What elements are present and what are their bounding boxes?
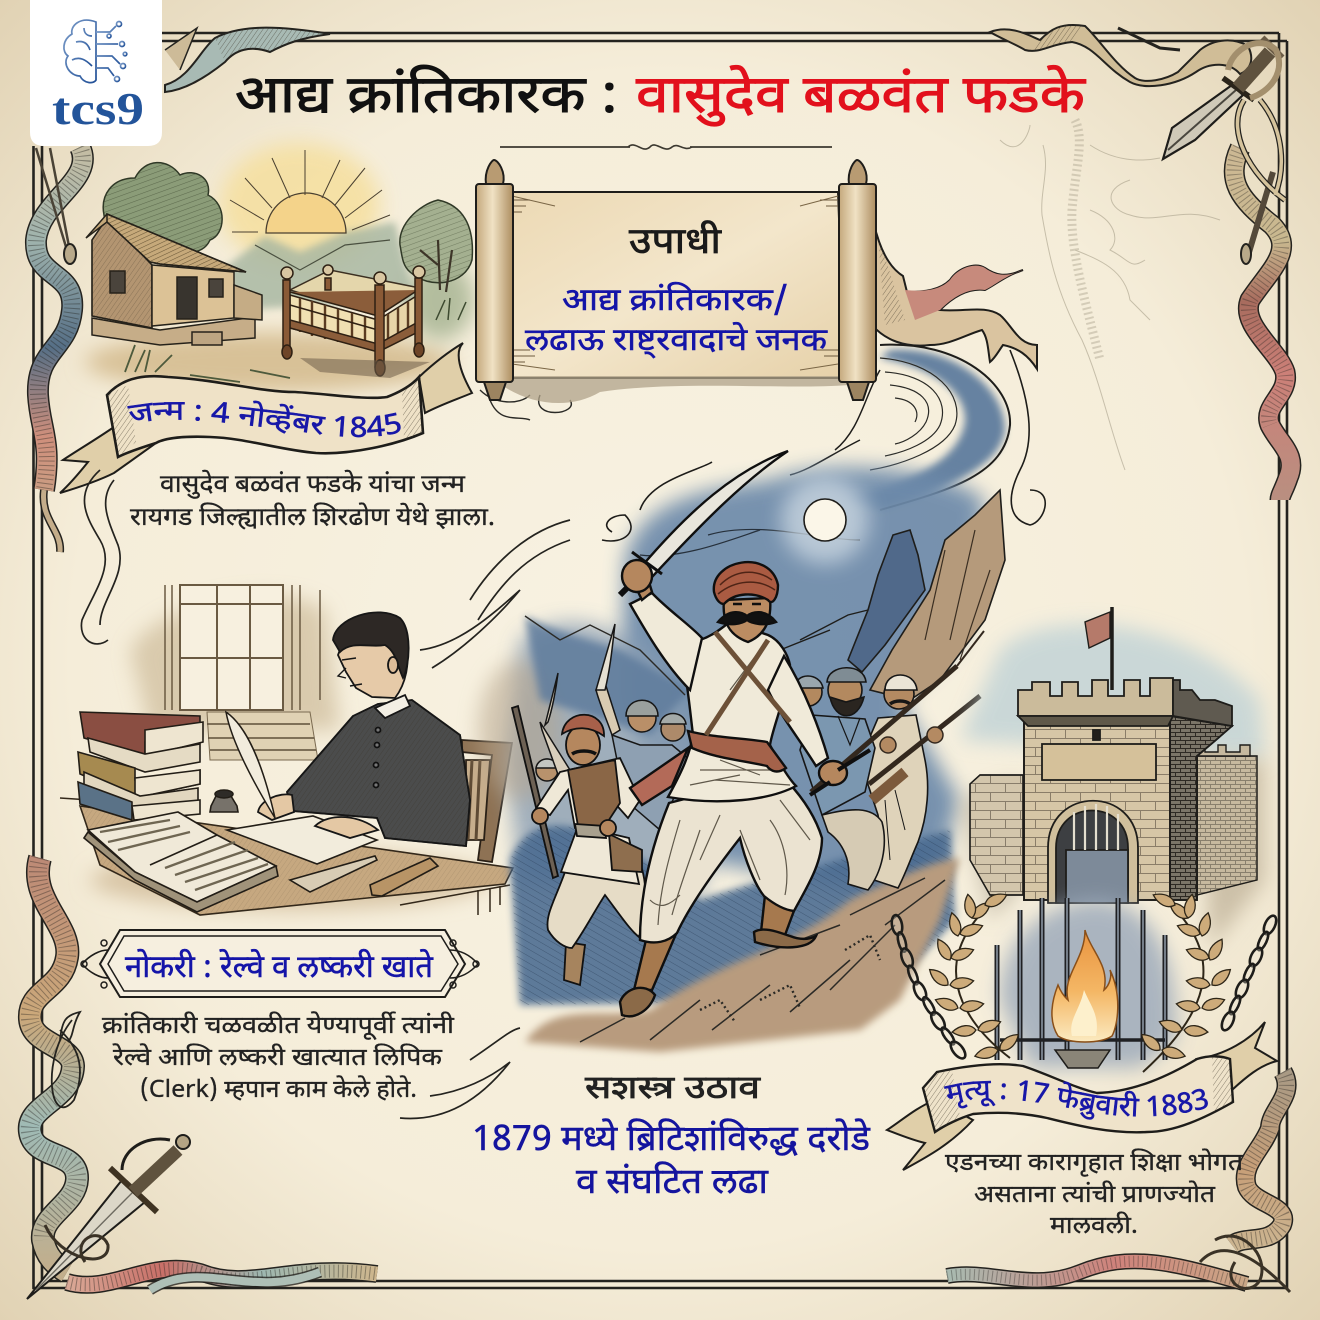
icon: circuit brain bbox=[64, 20, 127, 83]
death date label: मृत्यू : 17 फेब्रुवारी 1883 bbox=[944, 1080, 1208, 1120]
chain right bbox=[1219, 914, 1279, 1032]
ribbon: top left border braid bbox=[36, 147, 83, 552]
uprising description: 1879 मध्ये ब्रिटिशांविरुद्ध दरोडे bbox=[472, 1118, 871, 1165]
birth description: वासुदेव बळवंत फडके यांचा जन्म bbox=[160, 468, 466, 503]
employment description bbox=[102, 1011, 455, 1107]
background comrades, right bbox=[794, 668, 928, 890]
scroll heading: उपाधी bbox=[629, 220, 722, 268]
chain left bbox=[890, 914, 968, 1061]
main fighter bbox=[620, 451, 870, 1016]
chair bbox=[462, 740, 512, 862]
ribbon: top left twist on border bbox=[165, 28, 330, 92]
scroll title text bbox=[525, 282, 828, 363]
scroll parchment body bbox=[510, 192, 845, 378]
sash bbox=[688, 731, 786, 771]
ribbon: bottom left border braid bbox=[30, 858, 80, 1272]
uprising description bbox=[472, 1118, 871, 1208]
illustration: clerk at desk bbox=[60, 585, 513, 915]
laurel right bbox=[1138, 890, 1234, 1072]
window bbox=[165, 585, 320, 710]
legs bbox=[634, 934, 676, 990]
death description: असताना त्यांची प्राणज्योत bbox=[974, 1180, 1216, 1212]
title: वासुदेव बळवंत फडके bbox=[636, 65, 1086, 134]
scroll right roller bbox=[839, 160, 876, 400]
logo wordmark: tcs9 bbox=[52, 83, 144, 134]
cradle bbox=[281, 265, 425, 376]
tower bbox=[1018, 678, 1232, 903]
sword bbox=[642, 451, 788, 577]
blue swirl below scroll bbox=[480, 345, 1045, 525]
death description: एडनच्या कारागृहात शिक्षा भोगत bbox=[945, 1148, 1244, 1180]
raised arm bbox=[630, 593, 702, 690]
sword: bottom left bbox=[27, 1135, 190, 1299]
uprising description: व संघटित लढा bbox=[576, 1161, 769, 1208]
decorative ribbon wisps bbox=[81, 470, 570, 1118]
sword: top right bbox=[1163, 38, 1282, 159]
laurel left bbox=[926, 890, 1022, 1061]
open ledger bbox=[84, 812, 278, 912]
iron bars bbox=[997, 898, 1165, 1060]
illustration: armed uprising bbox=[478, 451, 1005, 1052]
ribbon: bottom left corner bbox=[45, 1225, 377, 1290]
blue peak bbox=[848, 530, 925, 672]
hut bbox=[86, 214, 262, 345]
title bbox=[235, 65, 1086, 134]
mountain left bbox=[525, 616, 690, 735]
scroll left roller bbox=[476, 160, 513, 400]
title: आद्य क्रांतिकारक : bbox=[235, 66, 618, 134]
wind swirls bbox=[602, 462, 712, 541]
death ribbon banner bbox=[884, 1021, 1278, 1171]
background paper pile bbox=[207, 712, 318, 760]
quill bbox=[226, 712, 275, 818]
employment description: (Clerk) म्हपान काम केले होते. bbox=[140, 1075, 417, 1107]
scroll ribbon flowing right bbox=[872, 224, 1037, 369]
employment nameplate bbox=[81, 930, 479, 997]
title divider ornament bbox=[500, 145, 832, 149]
inkpot bbox=[210, 790, 238, 812]
parchment scroll: title bbox=[476, 160, 1045, 525]
cross belts bbox=[706, 632, 790, 735]
notebook bbox=[227, 816, 377, 864]
scroll title text: लढाऊ राष्ट्रवादाचे जनक bbox=[525, 322, 828, 363]
icon: sun with rays bbox=[230, 150, 390, 233]
birth ribbon banner bbox=[59, 342, 474, 494]
trees bbox=[103, 163, 472, 320]
left fighter bbox=[512, 706, 645, 985]
side walls bbox=[970, 745, 1257, 895]
logo card bbox=[30, 0, 162, 146]
uprising heading: सशस्त्र उठाव bbox=[585, 1070, 761, 1112]
illustration: village birth scene bbox=[85, 143, 474, 392]
stack of books bbox=[78, 712, 203, 820]
icon: flame bbox=[1052, 930, 1118, 1042]
birth description: रायगड जिल्ह्यातील शिरढोण येथे झाला. bbox=[130, 501, 495, 536]
background comrades, left bbox=[536, 624, 690, 830]
desk bbox=[80, 806, 513, 915]
lowered arm bbox=[768, 656, 828, 766]
smoke wash bbox=[1000, 900, 1176, 1068]
clerk figure bbox=[258, 612, 470, 846]
employment label: नोकरी : रेल्वे व लष्करी खाते bbox=[125, 949, 434, 990]
ribbon: right border braid bbox=[1234, 100, 1291, 500]
birth date label: जन्म : 4 नोव्हेंबर 1845 bbox=[127, 400, 401, 438]
moon bbox=[781, 476, 869, 564]
flame bowl bbox=[1055, 1050, 1110, 1068]
illustration: fort prison bbox=[890, 607, 1279, 1072]
ribbon: top right twist on border bbox=[990, 25, 1251, 86]
birth description bbox=[130, 468, 495, 536]
head bbox=[724, 598, 770, 642]
employment description: क्रांतिकारी चळवळीत येण्यापूर्वी त्यांनी bbox=[102, 1011, 455, 1043]
sky and moody wash bbox=[478, 467, 1005, 1052]
employment description: रेल्वे आणि लष्करी खात्यात लिपिक bbox=[111, 1043, 443, 1075]
death description: मालवली. bbox=[1050, 1211, 1138, 1243]
faint map, top right bbox=[1000, 120, 1220, 470]
rifles bbox=[811, 631, 984, 800]
cliff right bbox=[870, 490, 1005, 700]
flag bbox=[1085, 607, 1112, 690]
ribbon: bottom right corner bbox=[947, 1072, 1290, 1292]
desk items bbox=[290, 856, 438, 896]
scroll title text: आद्य क्रांतिकारक/ bbox=[562, 282, 788, 323]
torso bbox=[668, 622, 796, 801]
death description bbox=[945, 1148, 1244, 1243]
